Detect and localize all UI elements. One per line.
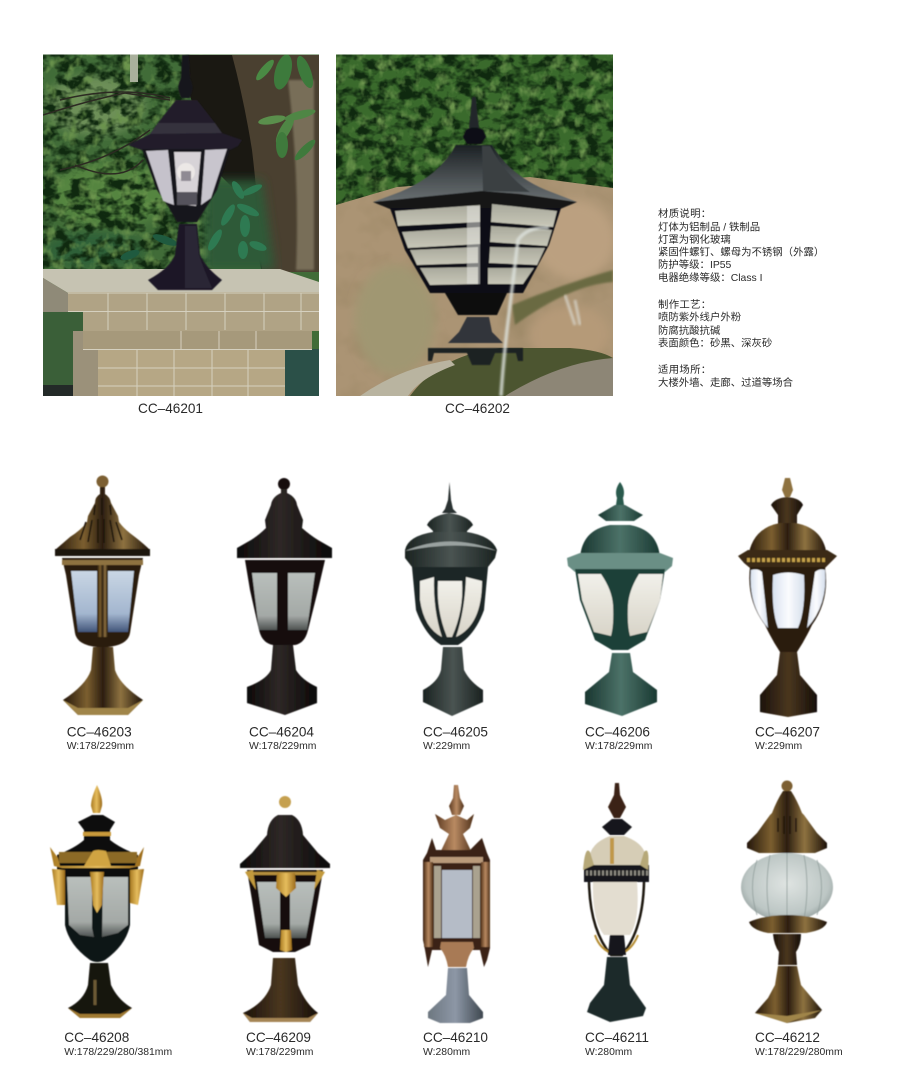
label: CC-46208: [64, 1030, 172, 1058]
craft list: 表面颜色：砂黑、深灰砂: [658, 336, 772, 350]
craft list: [658, 310, 772, 350]
label: CC-46209: [246, 1030, 313, 1058]
materials list: 防护等级：IP55: [658, 258, 732, 271]
photo: CC-46201 lamp on brick pillar: [43, 53, 319, 396]
label: CC-46212: [755, 1030, 843, 1058]
materials list: 电器绝缘等级：Class I: [658, 271, 762, 284]
lamp: black pagoda lantern: [373, 96, 577, 365]
label: CC-46211: [585, 1030, 649, 1058]
product: CC-46204 black lantern: [237, 478, 332, 715]
label: CC-46207: CC–46207: [755, 724, 820, 740]
materials list: 灯体为铝制品 / 铁制品: [658, 220, 760, 234]
usage list: 大楼外墙、走廊、过道等场合: [658, 376, 794, 389]
label: CC-46205: CC–46205: [423, 724, 488, 740]
label: CC-46203: CC–46203: [67, 724, 132, 740]
product: CC-46209 black and gold lantern: [240, 796, 330, 1022]
label: CC-46204: W:178/229mm: [249, 741, 316, 752]
product: CC-46205 slate lantern: [405, 482, 497, 716]
label: CC-46203: W:178/229mm: [67, 741, 134, 752]
product: CC-46206 green lantern: [567, 482, 673, 716]
product: CC-46203 bronze lantern: [55, 476, 150, 715]
materials list: 灯罩为钢化玻璃: [658, 233, 731, 246]
caption: CC-46202: CC–46202: [445, 401, 510, 416]
label: CC-46207: W:229mm: [755, 741, 802, 752]
label: CC-46205: W:229mm: [423, 741, 470, 752]
materials list: [658, 220, 824, 284]
product: CC-46207 bronze lantern with white glass: [738, 478, 837, 717]
lamp: black four-sided lantern: [128, 55, 242, 290]
label: CC-46207: [755, 724, 820, 752]
materials list: 紧固件螺钉、螺母为不锈钢（外露）: [658, 246, 824, 258]
label: CC-46211: W:280mm: [585, 1047, 632, 1058]
label: CC-46206: CC–46206: [585, 724, 650, 740]
product: CC-46210 copper tall lantern: [423, 785, 490, 1023]
label: CC-46210: CC–46210: [423, 1030, 488, 1045]
caption: CC-46201: CC–46201: [138, 401, 203, 416]
label: CC-46211: CC–46211: [585, 1030, 649, 1045]
label: CC-46205: [423, 724, 488, 752]
heading: craft: 制作工艺：: [658, 298, 711, 311]
product: CC-46208 black and gold urn lantern: [50, 785, 144, 1018]
product: CC-46211 glass urn lantern: [583, 783, 649, 1022]
craft list: 防腐抗酸抗碱: [658, 324, 721, 337]
product: CC-46212 glass globe lantern: [741, 780, 833, 1023]
water stream: [501, 228, 549, 396]
label: CC-46212: CC–46212: [755, 1030, 820, 1045]
text block: specifications: [658, 207, 824, 389]
label: CC-46206: [585, 724, 652, 752]
label: CC-46210: [423, 1030, 488, 1058]
craft list: 喷防紫外线户外粉: [658, 310, 742, 324]
label: CC-46204: [249, 724, 316, 752]
label: CC-46212: W:178/229/280mm: [755, 1047, 843, 1058]
heading: usage: 适用场所：: [658, 363, 711, 376]
label: CC-46209: CC–46209: [246, 1030, 311, 1045]
label: CC-46208: CC–46208: [64, 1030, 129, 1045]
label: CC-46210: W:280mm: [423, 1047, 470, 1058]
label: CC-46204: CC–46204: [249, 724, 314, 740]
heading: materials: 材质说明：: [658, 207, 711, 220]
photo: CC-46202 lamp on rock with fountain: [336, 54, 615, 396]
label: CC-46208: W:178/229/280/381mm: [64, 1047, 172, 1058]
label: CC-46203: [67, 724, 134, 752]
label: CC-46206: W:178/229mm: [585, 741, 652, 752]
label: CC-46209: W:178/229mm: [246, 1047, 313, 1058]
